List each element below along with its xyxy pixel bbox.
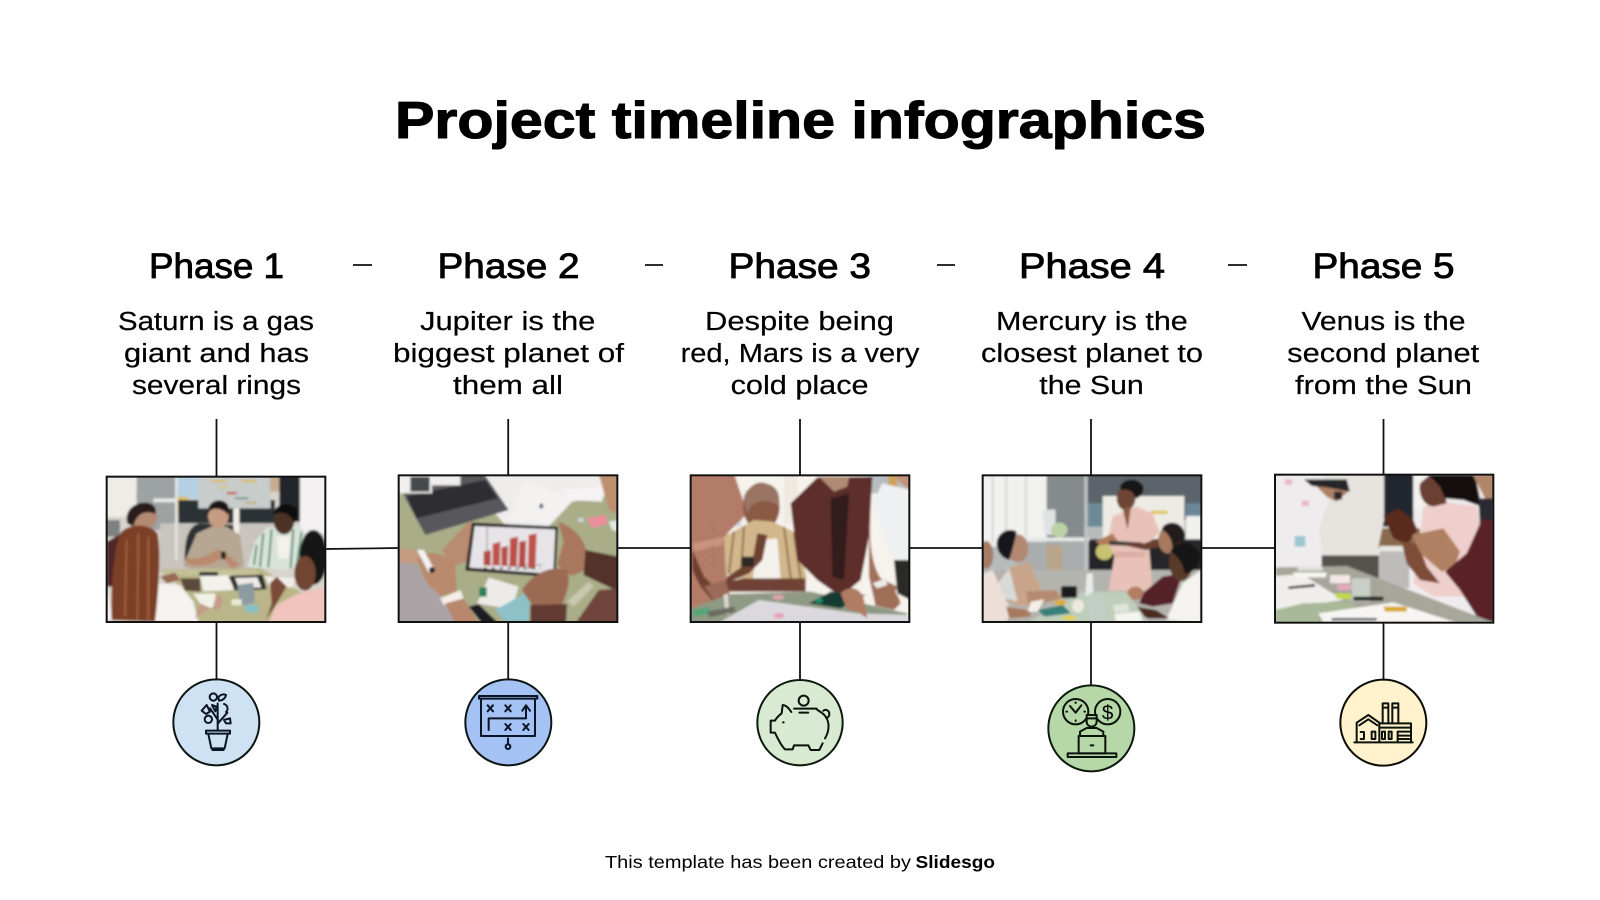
phase 1 heading: Phase 1 [149,247,284,286]
phase 4 description: the Sun [1039,372,1144,400]
phase 5 description: from the Sun [1295,372,1472,400]
dash between phase 3 and 4 [937,264,955,266]
dash between phase 1 and 2 [353,264,372,266]
icon 3: piggy bank in pale green circle [757,680,843,765]
phase 1 description: Saturn is a gas [118,308,314,336]
phase 5 heading: Phase 5 [1312,247,1454,286]
icon 5: factory in cream circle [1340,680,1426,766]
phase 3 description [681,308,920,400]
photo 1 frame [107,477,325,622]
phase 5 description: Venus is the [1302,308,1466,336]
photo 3: team leaning over a map [690,474,910,623]
phase 2 heading: Phase 2 [438,247,580,286]
photo 1: team at a meeting table [106,476,326,623]
phase 2 description: biggest planet of [393,340,625,368]
icon 2: strategy board in blue circle [465,679,551,765]
photo 4: presenter standing in a meeting room [982,474,1202,623]
footer credit: This template has been created by [605,852,911,872]
photo 5: team applauding [1270,470,1500,627]
phase 5 description [1287,308,1479,400]
icon 1: potted plant in light blue circle [173,679,259,765]
phase 3 heading: Phase 3 [728,247,871,286]
phase 1 description [118,308,314,400]
dash between phase 4 and 5 [1228,264,1247,266]
phase 4 heading: Phase 4 [1019,247,1165,286]
phase 3 description: cold place [731,372,869,400]
photo 3 frame [691,475,909,622]
dash between phase 2 and 3 [645,264,663,266]
phase 4 description: closest planet to [981,340,1203,368]
phase 5 description: second planet [1287,340,1479,368]
phase 3 description: Despite being [705,308,894,336]
connector lines: text to photos to icons [216,419,1384,685]
photo 5 frame [1275,475,1493,623]
footer credit: Slidesgo [916,852,995,872]
footer credit [605,852,995,872]
phase 1 description: several rings [132,372,301,400]
dollar sign on coin: $ [1102,701,1114,724]
title: Project timeline infographics [395,92,1206,150]
phase 2 description: them all [453,372,563,400]
phase 2 description [393,308,625,400]
phase 2 description: Jupiter is the [420,308,595,336]
phase 3 description: red, Mars is a very [681,340,920,368]
photo 4 frame [983,475,1201,622]
photo 2: tablet with bar chart [398,474,618,623]
phase 1 description: giant and has [124,340,309,368]
photo 2 frame [399,475,617,622]
phase 4 description: Mercury is the [996,308,1188,336]
icon 4: worker with clock and dollar in green circle [1048,685,1134,771]
phase 4 description [981,308,1203,400]
